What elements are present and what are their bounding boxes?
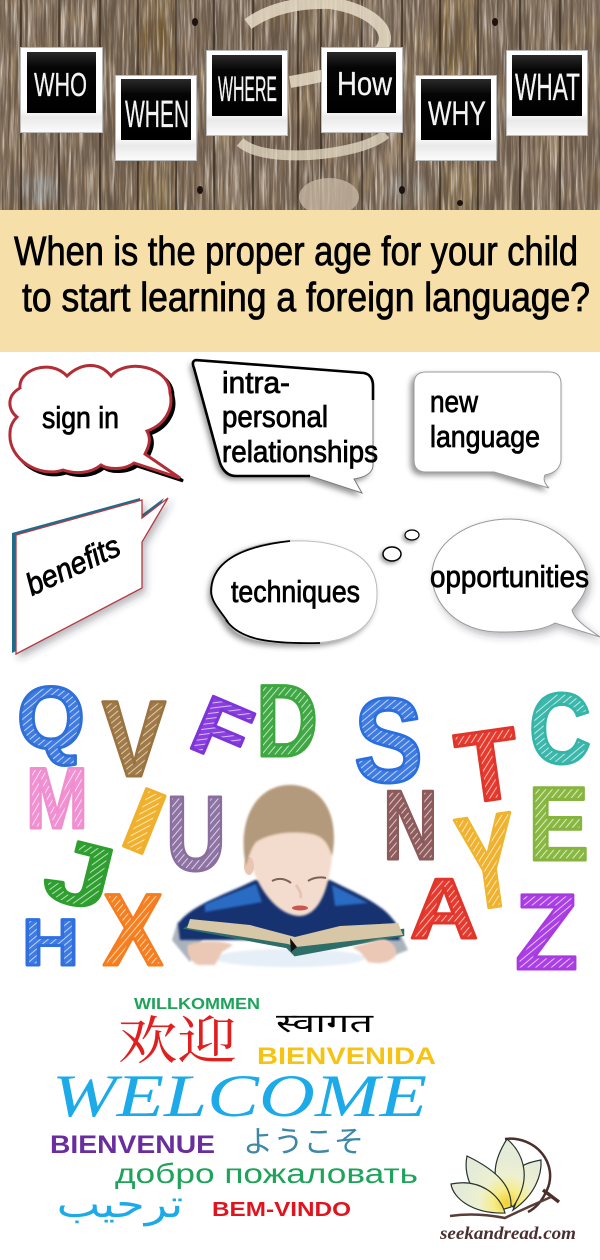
Russian welcome: добро пожаловать: [115, 1158, 418, 1189]
welcome word cloud: [50, 996, 436, 1226]
speech bubble: intra-personal relationships: [193, 360, 378, 493]
thought dot large: [383, 547, 401, 561]
letter Y: Y: [448, 785, 528, 940]
book pages: [187, 919, 403, 947]
branch: [450, 1197, 551, 1218]
title band: [0, 210, 600, 352]
letter X: X: [103, 873, 163, 987]
letter C: C: [529, 673, 591, 785]
letter M: M: [26, 751, 88, 847]
letter N: N: [383, 770, 438, 880]
photo card: WHEN: [116, 76, 196, 160]
letter T: T: [449, 706, 526, 826]
nose: [296, 885, 301, 898]
WILLKOMMEN: WILLKOMMEN: [134, 996, 260, 1013]
BIENVENUE: BIENVENUE: [50, 1131, 215, 1159]
speech bubble: sign in: [10, 366, 183, 481]
sleeves: [172, 920, 408, 962]
letter H: H: [22, 905, 79, 979]
photo card: HOW: [322, 48, 402, 132]
letter E: E: [528, 766, 589, 883]
letter Z: Z: [515, 871, 578, 992]
letter D: D: [256, 664, 318, 778]
photo card: WHY: [416, 76, 496, 160]
label: new: [430, 384, 479, 419]
eyes: [272, 877, 326, 883]
letter J: J: [35, 818, 123, 931]
letter V: V: [102, 678, 166, 799]
Japanese welcome: ようこそ: [243, 1117, 364, 1161]
letter I: I: [109, 769, 179, 875]
label: techniques: [231, 574, 360, 609]
header: wooden wall banner: [0, 0, 600, 216]
table shadow: [215, 949, 365, 967]
photo card: WHERE: WHERE: [218, 70, 277, 109]
label: language: [430, 419, 540, 454]
hands: [187, 941, 233, 965]
ear: [244, 857, 254, 875]
photo card: WHAT: [506, 50, 588, 136]
label: intra-: [222, 365, 290, 400]
photo card: WHO: [20, 48, 102, 132]
thought bubble: techniques: [211, 530, 419, 643]
photo card: WHEN: WHEN: [125, 94, 189, 136]
photo card: WHO: WHO: [34, 66, 87, 103]
thought dot small: [405, 530, 419, 540]
Hindi welcome: स्वागत: [276, 1008, 375, 1038]
label: relationships: [222, 434, 378, 469]
petals: [451, 1139, 541, 1213]
letter U: U: [166, 775, 226, 893]
logo: seekandread.com: [439, 1139, 576, 1243]
magnifier: [505, 1139, 559, 1212]
BEM-VINDO: BEM-VINDO: [212, 1199, 351, 1221]
photo card: HOW: How: [337, 65, 392, 102]
letter Q: Q: [17, 668, 85, 767]
painted question mark: [240, 3, 386, 216]
letter F: F: [179, 679, 264, 784]
shirt: [178, 880, 400, 940]
book cover: [186, 925, 403, 955]
site name: seekandread.com: [439, 1223, 576, 1243]
scribbled alphabet letters: [17, 664, 591, 992]
illustration: boy reading a book: [172, 785, 408, 967]
label: benefits: [20, 528, 126, 602]
Arabic welcome: ترحيب: [57, 1182, 183, 1226]
label: personal: [222, 399, 328, 434]
letter A: A: [410, 862, 478, 957]
BIENVENIDA: BIENVENIDA: [257, 1043, 436, 1070]
label: sign in: [42, 400, 119, 435]
speech bubble: opportunities: [430, 519, 600, 637]
photo card: WHY: WHY: [428, 95, 486, 133]
mouth: [292, 906, 308, 910]
speech bubble: benefits: [12, 498, 168, 654]
letter S: S: [354, 674, 423, 808]
neck and face: [246, 786, 333, 916]
WELCOME: WELCOME: [52, 1063, 427, 1129]
hair: [244, 785, 334, 866]
Chinese welcome: 欢迎: [118, 999, 237, 1074]
wood planks: [0, 0, 600, 210]
photo card: WHERE: [206, 50, 288, 136]
speech bubble: new language: [414, 372, 561, 488]
